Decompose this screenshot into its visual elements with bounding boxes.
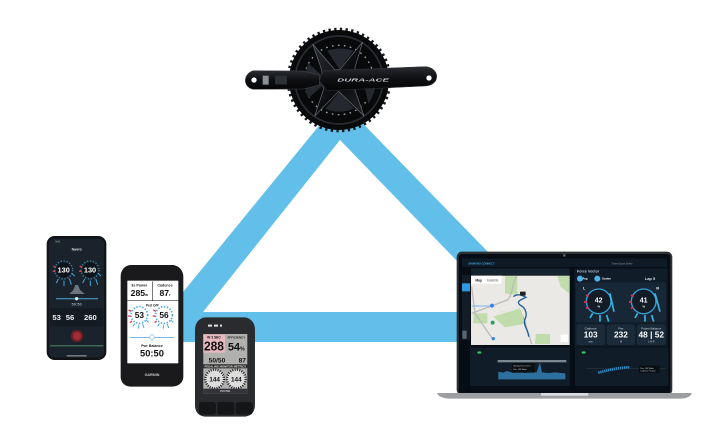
efficiency label: EFFICIENCY	[227, 336, 245, 340]
right power gauge: 130	[84, 266, 96, 275]
pwr balance value: 50:50	[140, 349, 164, 359]
outer chainring	[289, 30, 389, 130]
soft key labels	[203, 389, 247, 393]
sidebar	[462, 275, 470, 340]
scatter chart panel: Cadence: 91 rpm	[640, 370, 656, 373]
laptop lid	[457, 252, 672, 395]
pedal label: Ped O/P	[146, 304, 159, 308]
cadence card	[576, 324, 605, 345]
balance value: 50/50	[209, 358, 226, 365]
power balance card: 48 | 52	[639, 330, 664, 340]
home indicator	[67, 354, 87, 357]
metric 56: 56	[66, 313, 74, 322]
Garmin bike computer	[121, 265, 183, 387]
cadence value: 87	[239, 358, 246, 365]
map panel: Satellite	[487, 278, 499, 282]
laptop with analytics dashboard	[437, 252, 692, 399]
computer body	[195, 317, 255, 417]
route line	[513, 295, 529, 337]
blue triangle connecting crank and devices	[170, 100, 490, 342]
metric readouts: 53	[52, 313, 61, 322]
balance bar	[130, 336, 174, 339]
metric panel	[50, 308, 103, 327]
field dividers	[127, 281, 178, 301]
smartphone app	[47, 236, 106, 360]
crankset	[245, 29, 437, 131]
map toolbar	[471, 268, 570, 275]
phone body	[47, 236, 106, 360]
inner chainring bolts	[304, 45, 374, 115]
left force gauge	[576, 282, 666, 322]
power card: 232	[614, 330, 628, 340]
pause label: PAUSE	[220, 389, 230, 393]
brand lettering: DURA-ACE	[337, 77, 390, 83]
left power gauge: 130	[58, 266, 70, 275]
force vector panel: Scatter	[602, 277, 611, 281]
pwr balance label: Pwr Balance	[141, 344, 163, 348]
dashboard header	[462, 258, 667, 267]
metrics header bar: PEDALING MONITOR METRICS	[204, 364, 246, 368]
left crank arm	[245, 71, 319, 89]
left force gauge: %	[597, 304, 600, 308]
status bar: 9:41	[55, 242, 61, 244]
line chart panel	[470, 347, 570, 386]
right gauge: 144	[231, 376, 242, 383]
crank bolt holes	[251, 75, 432, 83]
power card	[607, 324, 635, 345]
3s power value: 285w	[131, 288, 148, 298]
3s power label: 3s Power	[131, 284, 148, 288]
trackpad notch	[541, 393, 588, 396]
cadence label: Cadence	[157, 284, 173, 288]
LED row	[208, 323, 222, 329]
phone screen	[49, 238, 104, 358]
right force gauge: 41	[640, 297, 648, 304]
hardware buttons	[199, 402, 253, 415]
computer screen	[127, 281, 178, 363]
green status line	[50, 344, 103, 347]
record button	[71, 330, 83, 342]
cadence card: Cadence	[585, 326, 597, 330]
balance bar	[56, 298, 98, 299]
power balance card: Power Balance	[641, 326, 662, 330]
GARMIN logo: GARMIN	[145, 373, 160, 377]
force vector panel: Avg	[583, 277, 588, 281]
map panel	[471, 276, 570, 345]
power value: 288	[204, 340, 224, 354]
power balance card	[637, 324, 666, 345]
left force gauge: L	[583, 286, 586, 291]
chainring teeth	[288, 29, 390, 131]
right force gauge: %	[642, 304, 645, 308]
left pedal gauge: 53	[135, 310, 144, 320]
balance marker	[75, 297, 78, 300]
webcam	[563, 254, 566, 257]
force vector panel	[574, 268, 668, 347]
cadence card: rpm	[589, 340, 593, 343]
sensor label	[263, 76, 269, 85]
balance value: 50:50	[72, 301, 83, 306]
laptop screen	[459, 254, 670, 393]
scatter chart panel: Pwr: 190 Watts	[640, 367, 654, 370]
cadence value: 87r	[159, 288, 171, 298]
computer screen	[203, 334, 247, 393]
force histogram	[69, 285, 85, 294]
laptop base	[437, 393, 692, 399]
right pedal gauge: 56	[159, 310, 169, 320]
power sensor pod	[275, 76, 287, 84]
highlighted power field	[203, 335, 225, 353]
scatter chart panel	[575, 347, 668, 386]
header buttons: Share Export Delete	[612, 262, 633, 265]
force vector panel: Lap 5	[645, 276, 656, 281]
right force gauge: R	[656, 286, 659, 291]
force vector panel: Force Vector	[577, 270, 600, 274]
left gauge: 144	[209, 376, 220, 383]
metric 260: 260	[84, 313, 97, 322]
left force gauge: 42	[595, 297, 603, 304]
app logo: favero	[72, 248, 82, 252]
dashboard logo: SHIMANO CONNECT	[468, 261, 495, 265]
power balance card: L % R	[648, 341, 655, 343]
spider arms	[313, 42, 364, 116]
balance marker	[149, 334, 155, 340]
efficiency value: 54%	[228, 342, 245, 354]
power card: W	[620, 341, 623, 343]
map panel: Map	[475, 278, 482, 282]
line chart panel: Moving Time: 00:17	[513, 366, 531, 368]
computer body	[121, 265, 183, 387]
Wahoo bike computer	[195, 317, 255, 417]
W 3 SEC label: W 3 SEC	[207, 336, 221, 340]
line chart panel: Pwr: 190 Watts	[513, 368, 527, 371]
power card: Pwr	[618, 326, 624, 330]
right force gauge	[629, 286, 660, 322]
spider openings	[305, 49, 376, 112]
cadence card: 103	[584, 330, 598, 340]
crank arm	[319, 67, 437, 91]
